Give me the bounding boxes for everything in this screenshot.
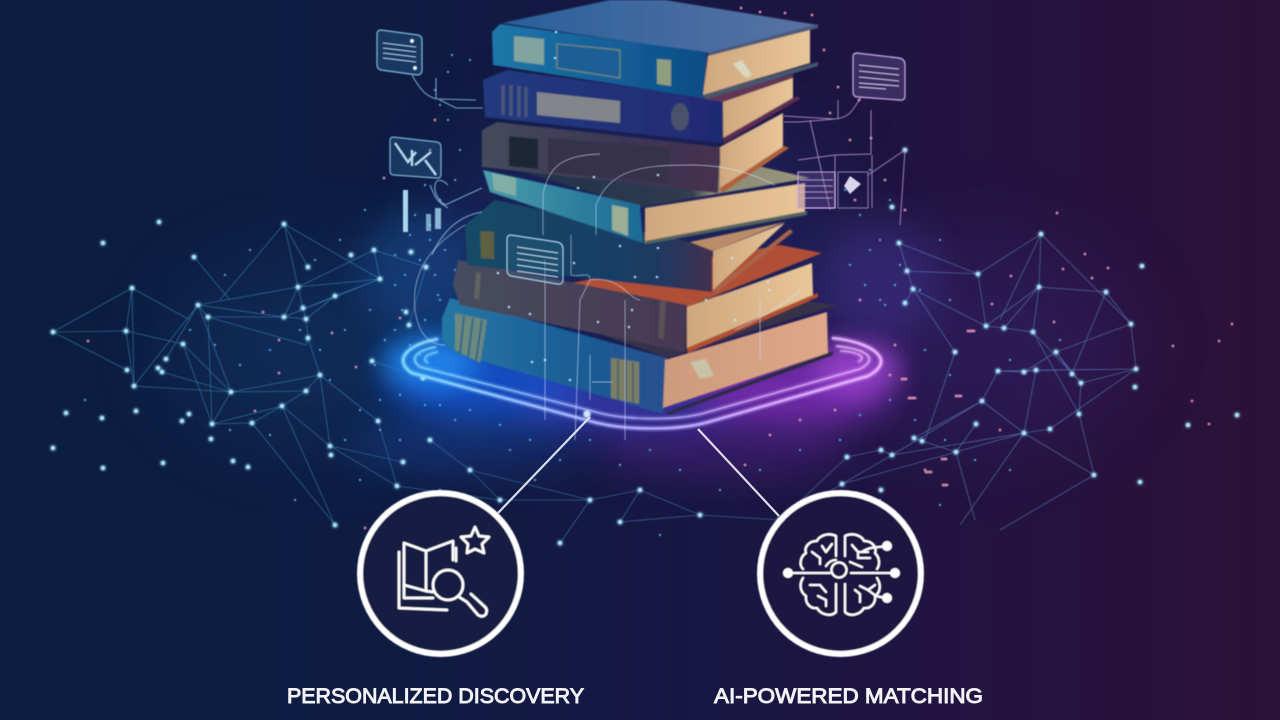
book stack <box>442 0 837 415</box>
book 1 blue <box>492 0 818 99</box>
ring platform <box>403 338 881 428</box>
panels: right lower holograms <box>798 172 868 208</box>
holographic panel on book <box>507 235 563 284</box>
connector: ai-powered matching <box>698 429 779 516</box>
network: left constellation <box>53 224 780 543</box>
book with magnifier and star <box>399 527 489 616</box>
label: personalized discovery: PERSONALIZED DISCOVERY <box>287 684 584 708</box>
connector: personalized discovery <box>498 411 590 513</box>
holographic overlay lines on books <box>414 154 800 440</box>
panel: top-left document <box>377 30 422 75</box>
particles: small scattered dots <box>85 55 1060 535</box>
icon: personalized discovery badge <box>360 493 521 654</box>
panel: left chart <box>390 137 441 178</box>
brain circuit <box>792 534 892 615</box>
connector lines: left <box>412 75 483 255</box>
book 7 bottom <box>442 292 837 415</box>
label: ai-powered matching: AI-POWERED MATCHING <box>714 684 983 708</box>
platform glow <box>350 336 902 478</box>
particles: pink dots <box>88 8 1232 528</box>
icon: ai-powered matching badge <box>760 493 921 654</box>
panel: top-right document <box>853 53 905 100</box>
connector lines: right <box>784 97 905 225</box>
network: right constellation <box>780 234 1136 530</box>
particles: main nodes <box>53 150 1237 543</box>
icon: bar chart <box>403 190 441 232</box>
book 3 grey <box>482 113 789 193</box>
book 2 navy <box>483 70 800 143</box>
book 6 orange <box>453 245 822 353</box>
book 4 teal <box>483 163 810 244</box>
particles: dots over books <box>498 32 769 380</box>
book 5 dark teal <box>465 200 793 293</box>
